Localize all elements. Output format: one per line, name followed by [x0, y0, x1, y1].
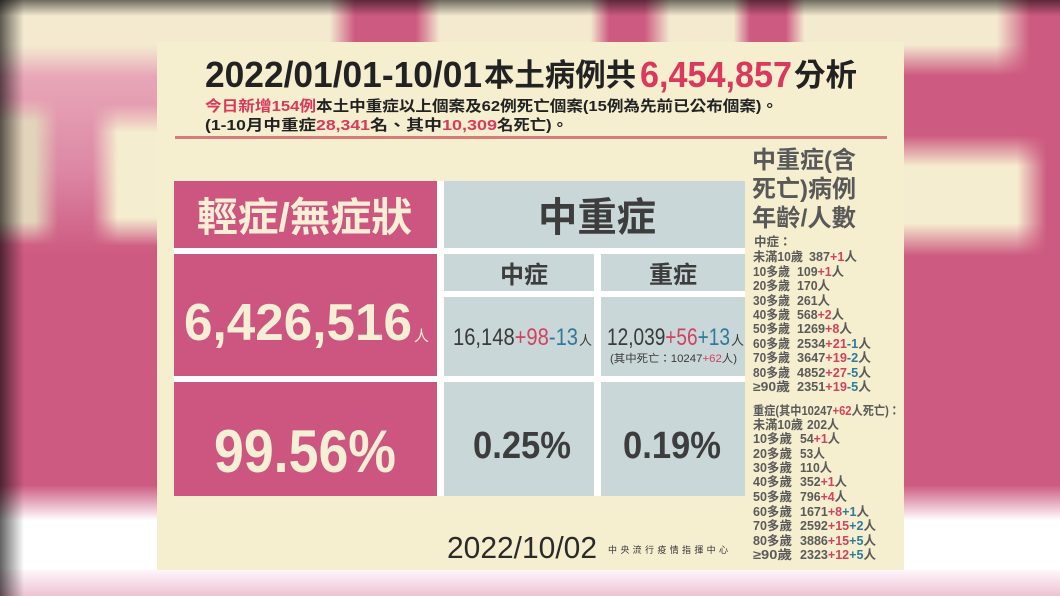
- list: severe cases by age: [753, 403, 900, 562]
- panel: moderate and severe column: [444, 181, 745, 496]
- list: severe cases by age: 352+1人: [800, 475, 847, 489]
- subtitle: daily summary: 名死亡)。: [497, 116, 568, 134]
- list: severe cases by age: 50多歲: [753, 489, 792, 504]
- list: severe cases by age: 70多歲: [753, 518, 792, 533]
- panel: mild / asymptomatic column: 99.56%: [214, 418, 396, 485]
- subtitle: daily summary: (1-10月中重症: [205, 116, 316, 134]
- list: severe cases by age: 3886+15+5人: [800, 534, 876, 548]
- panel: main cream card: [157, 42, 904, 570]
- panel: moderate and severe column: 中症: [500, 262, 548, 289]
- panel: moderate and severe column: 0.19%: [623, 425, 721, 467]
- list: moderate cases by age: 50多歲: [753, 321, 790, 336]
- heading: age breakdown: 中重症(含: [752, 147, 856, 174]
- list: moderate cases by age: 30多歲: [753, 293, 790, 308]
- list: severe cases by age: 53人: [800, 447, 825, 461]
- list: moderate cases by age: 2534+21-1人: [797, 337, 871, 351]
- panel: mild / asymptomatic column: 輕症/無症狀: [197, 196, 412, 240]
- list: severe cases by age: 60多歲: [753, 504, 792, 519]
- list: severe cases by age: 2323+12+5人: [800, 548, 876, 562]
- heading: age breakdown: 死亡)病例: [752, 176, 856, 203]
- list: moderate cases by age: 60多歲: [753, 336, 790, 351]
- list: moderate cases by age: 109+1人: [797, 265, 844, 279]
- list: moderate cases by age: 387+1人: [809, 250, 857, 264]
- date and issuer: [447, 530, 728, 565]
- list: moderate cases by age: 170人: [797, 279, 830, 293]
- list: severe cases by age: 未滿10歲: [753, 417, 803, 432]
- list: severe cases by age: 30多歲: [753, 460, 792, 475]
- subtitle: daily summary: [205, 97, 778, 134]
- list: moderate cases by age: 10多歲: [753, 264, 790, 279]
- title: [205, 54, 857, 95]
- list: moderate cases by age: 261人: [797, 294, 830, 308]
- list: moderate cases by age: 40多歲: [753, 307, 790, 322]
- panel: moderate and severe column: 12,039+56+13: [607, 324, 730, 351]
- panel: moderate and severe column: (其中死亡：10247 +62人): [610, 351, 737, 365]
- list: severe cases by age: ≥90歲: [753, 547, 793, 562]
- list: moderate cases by age: ≥90歲: [753, 379, 791, 394]
- list: severe cases by age: 796+4人: [800, 490, 847, 504]
- panel: moderate and severe column: 16,148+98-13: [453, 324, 578, 351]
- list: severe cases by age: 202人: [807, 418, 839, 432]
- list: severe cases by age: 40多歲: [753, 474, 792, 489]
- list: moderate cases by age: 1269+8人: [797, 322, 852, 336]
- list: severe cases by age: 重症(其中10247+62人死亡)：: [753, 403, 900, 418]
- panel: mild / asymptomatic column: [174, 181, 437, 496]
- list: moderate cases by age: [753, 234, 871, 394]
- date and issuer: 2022/10/02: [447, 530, 597, 565]
- list: severe cases by age: 80多歲: [753, 533, 792, 548]
- panel: moderate and severe column: 人: [731, 333, 744, 348]
- panel: mild / asymptomatic column: 6,426,516: [184, 294, 412, 352]
- table backing: [174, 181, 745, 496]
- subtitle: daily summary: 10,309: [442, 117, 497, 134]
- subtitle: daily summary: 名、其中: [370, 116, 442, 134]
- title: 6,454,857: [640, 54, 792, 95]
- list: severe cases by age: 54+1人: [800, 432, 840, 446]
- subtitle: daily summary: 28,341: [316, 117, 370, 134]
- title: 分析: [794, 58, 857, 93]
- date and issuer: 中央流行疫情指揮中心: [608, 544, 728, 555]
- list: moderate cases by age: 中症：: [754, 234, 792, 249]
- panel: moderate and severe column: 0.25%: [473, 425, 571, 467]
- heading: age breakdown: 年齡/人數: [752, 205, 856, 232]
- subtitle: daily summary: 今日新增154例: [205, 97, 316, 115]
- title: 2022/01/01-10/01: [205, 54, 482, 95]
- list: moderate cases by age: 3647+19-2人: [797, 351, 871, 365]
- heading: age breakdown: [752, 147, 856, 232]
- list: severe cases by age: 1671+8+1人: [800, 505, 869, 519]
- list: severe cases by age: 20多歲: [753, 446, 792, 461]
- panel: moderate and severe column: 人: [579, 333, 592, 348]
- list: moderate cases by age: 568+2人: [797, 308, 844, 322]
- list: moderate cases by age: 70多歲: [753, 350, 790, 365]
- list: severe cases by age: 10多歲: [753, 431, 792, 446]
- list: moderate cases by age: 未滿10歲: [753, 249, 803, 264]
- list: severe cases by age: 110人: [800, 461, 832, 475]
- list: severe cases by age: 2592+15+2人: [800, 519, 876, 533]
- list: moderate cases by age: 2351+19-5人: [797, 380, 871, 394]
- list: moderate cases by age: 80多歲: [753, 365, 790, 380]
- subtitle: daily summary: 本土中重症以上個案及62例死亡個案(15例為先前已公布個案)。: [316, 97, 778, 115]
- list: moderate cases by age: 20多歲: [753, 278, 790, 293]
- list: moderate cases by age: 4852+27-5人: [797, 366, 871, 380]
- title: 本土病例共: [484, 58, 636, 93]
- panel: moderate and severe column: 中重症: [538, 196, 656, 240]
- panel: mild / asymptomatic column: 人: [414, 328, 429, 345]
- panel: moderate and severe column: 重症: [649, 262, 697, 289]
